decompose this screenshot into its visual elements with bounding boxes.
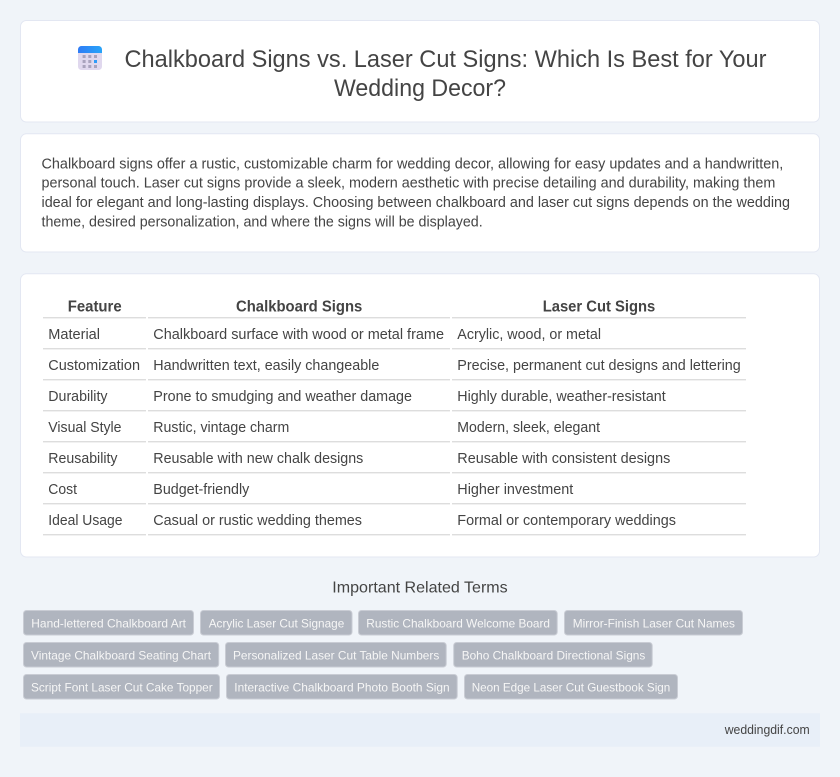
- row: cost: Cost: [48, 482, 77, 498]
- tag: [24, 610, 194, 635]
- table header row: Laser Cut Signs: [543, 299, 655, 316]
- row: material: Material: [48, 327, 100, 343]
- tag: Interactive Chalkboard Photo Booth Sign: [234, 680, 450, 694]
- row: visual style: Modern, sleek, elegant: [457, 420, 600, 436]
- row: material: Chalkboard surface with wood or metal frame: [153, 327, 444, 343]
- text block: introduction paragraph: personal touch. Laser cut signs provide a sleek, modern aesthetic with precise detailing and durability, making them: [42, 176, 775, 192]
- row: durability: Highly durable, weather-resistant: [457, 389, 666, 405]
- row: reusability: [48, 451, 670, 467]
- tags: related terms: [24, 610, 742, 699]
- tag: Neon Edge Laser Cut Guestbook Sign: [472, 680, 670, 694]
- tag: Hand-lettered Chalkboard Art: [31, 616, 187, 630]
- table header row: [68, 299, 655, 316]
- row: cost: [48, 482, 573, 498]
- row: ideal usage: [48, 513, 676, 529]
- row: reusability: Reusability: [48, 451, 118, 467]
- row: material: [48, 327, 601, 343]
- panel: comparison table: [20, 274, 820, 557]
- heading: important related terms: Important Related Terms: [332, 580, 508, 597]
- row: visual style: Visual Style: [48, 420, 121, 436]
- tag: Personalized Laser Cut Table Numbers: [233, 648, 439, 662]
- row: ideal usage: Casual or rustic wedding themes: [153, 513, 362, 529]
- tag: [24, 674, 220, 699]
- tag: [226, 642, 446, 667]
- row: visual style: Rustic, vintage charm: [153, 420, 289, 436]
- tag: Vintage Chalkboard Seating Chart: [31, 648, 212, 662]
- tag: Script Font Laser Cut Cake Topper: [31, 680, 213, 694]
- title: Wedding Decor?: [334, 75, 506, 102]
- row: customization: Handwritten text, easily changeable: [153, 358, 379, 374]
- row: visual style: [48, 420, 600, 436]
- text block: introduction paragraph: [42, 156, 790, 230]
- title: Chalkboard Signs vs. Laser Cut Signs: Which Is Best for Your: [124, 46, 766, 73]
- row: ideal usage: Formal or contemporary weddings: [457, 513, 676, 529]
- row: material: Acrylic, wood, or metal: [457, 327, 601, 343]
- icon: calendar: [78, 46, 102, 70]
- row: durability: [48, 389, 666, 405]
- tag: Boho Chalkboard Directional Signs: [462, 648, 645, 662]
- text block: introduction paragraph: theme, desired personalization, and where the signs will be displayed.: [42, 214, 483, 230]
- tag: [24, 642, 219, 667]
- tag: [226, 674, 457, 699]
- row: reusability: Reusable with consistent designs: [457, 451, 670, 467]
- footer: [20, 713, 820, 747]
- tag: [200, 610, 352, 635]
- row: cost: Budget-friendly: [153, 482, 250, 498]
- row: cost: Higher investment: [457, 482, 573, 498]
- text block: introduction paragraph: Chalkboard signs offer a rustic, customizable charm for wedding decor, allowing for easy updates and a handwritten,: [42, 156, 783, 172]
- row: customization: Precise, permanent cut designs and lettering: [457, 358, 741, 374]
- row: ideal usage: Ideal Usage: [48, 513, 122, 529]
- tag: Rustic Chalkboard Welcome Board: [366, 616, 550, 630]
- table header row: Feature: [68, 299, 122, 316]
- row: customization: [48, 358, 741, 374]
- table header row: Chalkboard Signs: [236, 299, 362, 316]
- row: durability: Prone to smudging and weather damage: [153, 389, 412, 405]
- row: customization: Customization: [48, 358, 140, 374]
- panel: header: [20, 20, 820, 122]
- tag: [358, 610, 557, 635]
- row: reusability: Reusable with new chalk designs: [153, 451, 363, 467]
- tag: [564, 610, 742, 635]
- title: [124, 46, 766, 102]
- tag: Acrylic Laser Cut Signage: [209, 616, 345, 630]
- tag: [464, 674, 678, 699]
- tag: Mirror-Finish Laser Cut Names: [573, 616, 735, 630]
- text block: introduction paragraph: ideal for elegant and long-lasting displays. Choosing between chalkboard and laser cut signs depends on the wedding: [42, 195, 790, 211]
- panel: introduction: [20, 134, 820, 252]
- row: durability: Durability: [48, 389, 108, 405]
- footer source text: weddingdif.com: [724, 723, 810, 737]
- tag: [454, 642, 652, 667]
